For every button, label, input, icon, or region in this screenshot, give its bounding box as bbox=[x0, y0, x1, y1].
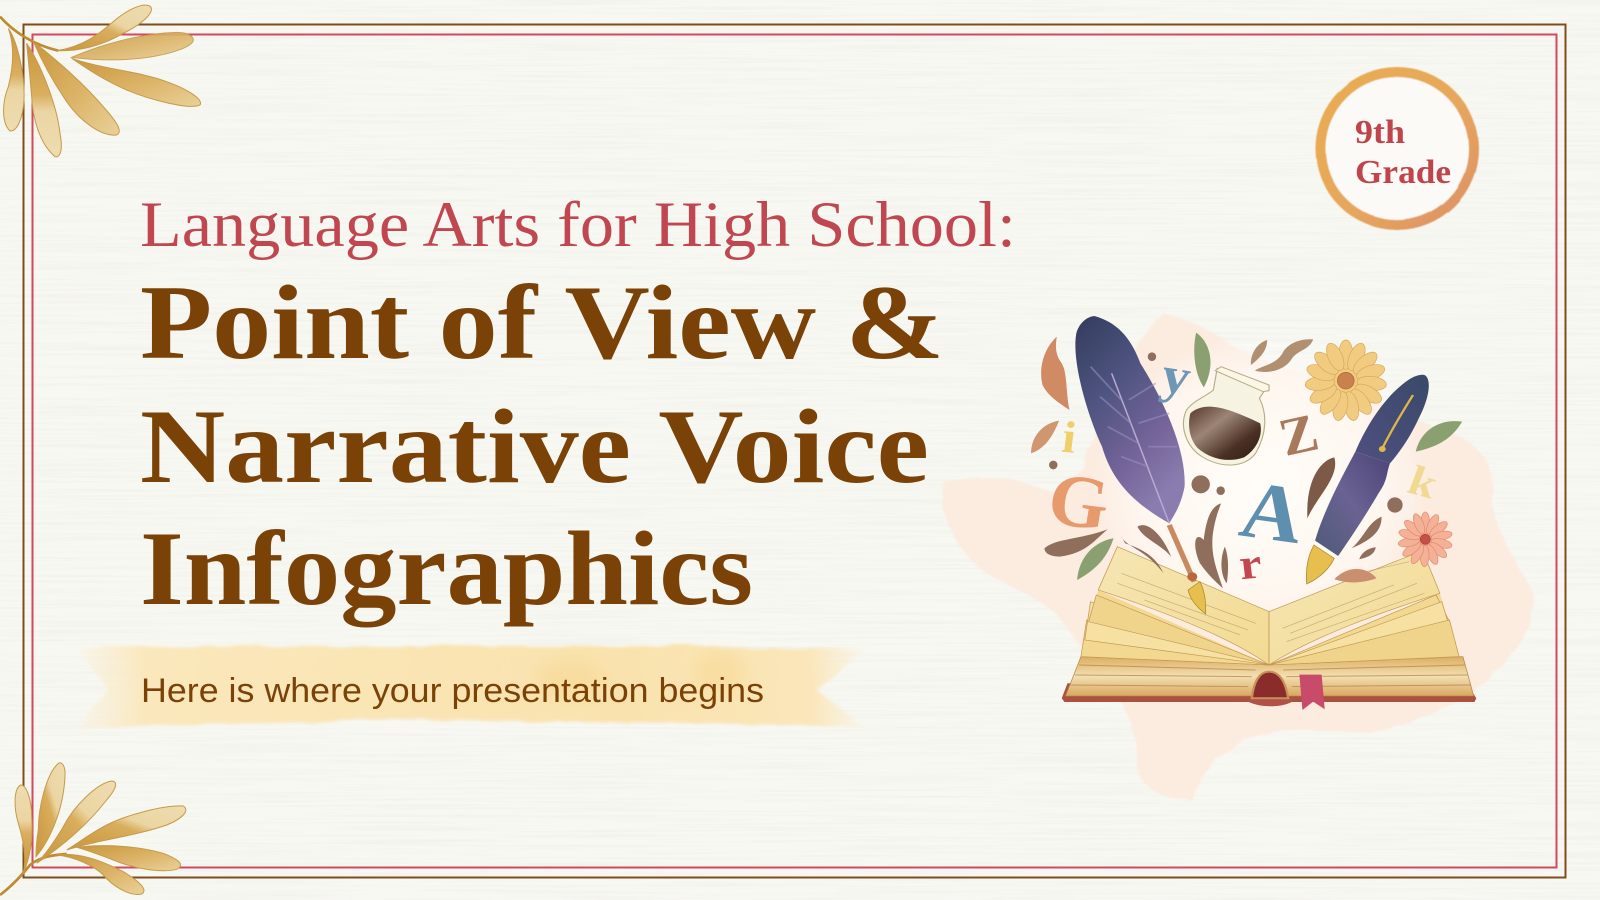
main title: Infographics bbox=[140, 510, 753, 627]
page filler bbox=[1081, 590, 1459, 665]
icon: golden leaf sprig top-left bbox=[0, 5, 200, 157]
floating letters: y bbox=[1157, 346, 1196, 406]
floating letters: r bbox=[1236, 539, 1264, 589]
floating letters: i bbox=[1059, 413, 1079, 463]
spine arch bbox=[1252, 672, 1288, 698]
fanned pages bbox=[1081, 595, 1459, 665]
badge text bbox=[1355, 114, 1451, 191]
subtitle line: Language Arts for High School: bbox=[140, 189, 1016, 261]
floating letters: Z bbox=[1272, 402, 1325, 467]
floating letters: A bbox=[1234, 465, 1311, 562]
main title: Point of View & bbox=[140, 264, 944, 381]
leaves bbox=[1031, 333, 1462, 582]
badge text: 9th bbox=[1355, 114, 1405, 151]
main title: Narrative Voice bbox=[140, 388, 929, 505]
icon: golden leaf sprig bottom-left bbox=[0, 763, 186, 895]
floating letters bbox=[1043, 346, 1444, 589]
badge text: Grade bbox=[1355, 154, 1451, 191]
watercolor blotches bbox=[536, 652, 746, 696]
banner with tagline bbox=[76, 645, 866, 728]
daisy: yellow bbox=[1305, 340, 1387, 422]
ink bottle bbox=[1183, 367, 1269, 465]
cover bbox=[1062, 683, 1476, 702]
soft glow bbox=[1091, 333, 1428, 640]
badge: 9th Grade bbox=[1320, 72, 1474, 225]
fountain pen bbox=[1306, 375, 1429, 584]
feather quill bbox=[1075, 316, 1206, 614]
main title bbox=[140, 264, 944, 627]
tagline: Here is where your presentation begins bbox=[141, 672, 764, 710]
badge ring bbox=[1320, 72, 1474, 225]
peach watercolor blob bbox=[943, 313, 1534, 800]
daisy: coral bbox=[1398, 512, 1453, 567]
bookmark bbox=[1299, 675, 1325, 710]
book bbox=[1062, 547, 1476, 710]
ink splashes and drops bbox=[1044, 339, 1403, 588]
text lines bbox=[1117, 562, 1425, 642]
watercolor ribbon bbox=[76, 645, 866, 728]
illustration: open book with quill and pen bbox=[943, 313, 1534, 800]
page block bbox=[1066, 657, 1474, 696]
floating letters: G bbox=[1043, 457, 1115, 546]
floating letters: k bbox=[1402, 456, 1444, 508]
left page bbox=[1098, 547, 1269, 665]
right page bbox=[1269, 551, 1440, 665]
